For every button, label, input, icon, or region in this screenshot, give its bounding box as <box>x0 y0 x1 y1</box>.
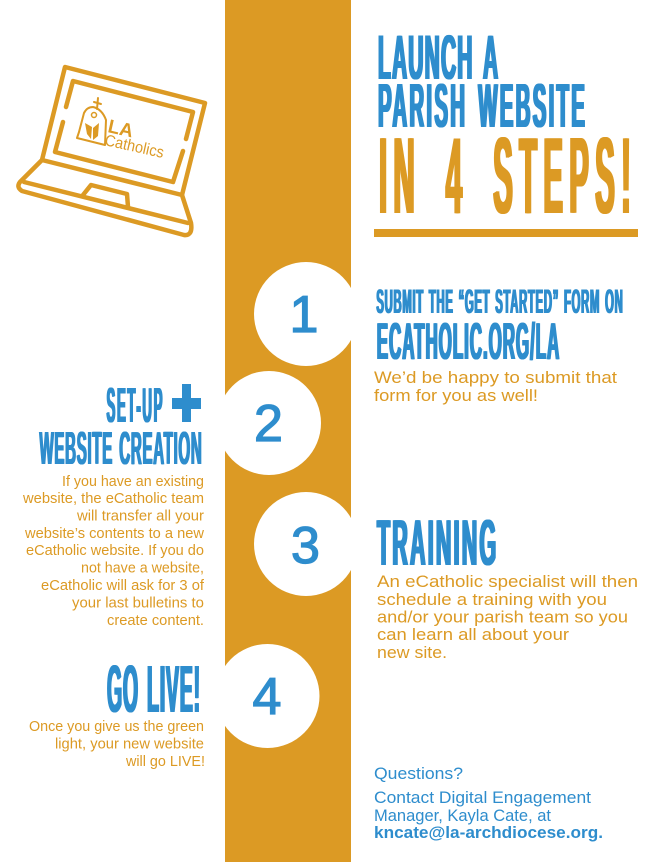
panel: step 3 training <box>377 507 638 662</box>
logo text: LA: LA <box>106 116 135 142</box>
contact text <box>374 789 603 842</box>
step 4 badge: 4 <box>253 668 281 726</box>
contact text: kncate@la-archdiocese.org. <box>374 824 603 842</box>
step 2 body text: create content. <box>107 613 204 629</box>
step 2 body text: website, the eCatholic team <box>22 491 204 507</box>
contact text: Manager, Kayla Cate, at <box>374 807 551 825</box>
step 4 heading: GO LIVE! <box>107 652 200 727</box>
logo text: Catholics: Catholics <box>103 132 165 162</box>
step 2 heading: Website Creation: WEBSITE CREATION <box>39 424 202 475</box>
icon: laptop with LA Catholics logo <box>18 67 205 235</box>
step 2 body text <box>22 474 205 629</box>
step 3 body text: schedule a training with you <box>377 590 607 609</box>
step 2 badge <box>217 371 321 475</box>
step 4 badge <box>216 644 320 748</box>
step 1 url: ECATHOLIC.ORG/LA <box>377 313 559 371</box>
step 2 body text: website’s contents to a new <box>24 526 205 542</box>
panel: step 2 set-up and website creation <box>22 378 205 629</box>
step 1 badge <box>254 262 358 366</box>
panel: questions and contact <box>374 764 603 842</box>
central gold band <box>225 0 351 862</box>
step 3 badge <box>254 492 358 596</box>
title line: Parish Website: PARISH WEBSITE <box>378 71 585 140</box>
step 2 badge: 2 <box>254 395 283 453</box>
step 1 body text: We’d be happy to submit that <box>374 368 617 387</box>
title line: In 4 Steps!: IN 4 STEPS! <box>379 115 631 236</box>
step 3 body text <box>377 572 638 662</box>
step 1 heading line: SUBMIT THE “GET STARTED” FORM ON <box>376 283 623 321</box>
step 3 heading: TRAINING <box>377 507 496 580</box>
step 4 body text: Once you give us the green <box>29 719 204 735</box>
step 3 badge: 3 <box>291 517 320 575</box>
step 3 body text: new site. <box>377 643 447 662</box>
title <box>378 23 631 236</box>
step 2 body text: not have a website, <box>81 560 204 576</box>
step 2 body text: will transfer all your <box>76 508 204 524</box>
step 4 body text: will go LIVE! <box>125 754 205 770</box>
step 2 body text: eCatholic will ask for 3 of <box>41 578 205 594</box>
icon: plus sign <box>172 384 201 422</box>
panel: step 1 submit form <box>374 283 623 405</box>
step 3 body text: and/or your parish team so you <box>377 608 628 626</box>
step 2 body text: your last bulletins to <box>72 596 204 612</box>
panel: step 4 go live <box>29 652 205 770</box>
contact text: Contact Digital Engagement <box>374 789 591 807</box>
title underline <box>374 229 638 237</box>
step 4 body text <box>29 719 205 770</box>
step 2 body text: eCatholic website. If you do <box>26 543 204 559</box>
step 1 body text: form for you as well! <box>374 386 538 405</box>
questions label: Questions? <box>374 764 463 783</box>
step 3 body text: An eCatholic specialist will then <box>377 572 638 591</box>
step 4 body text: light, your new website <box>55 736 204 752</box>
step 2 body text: If you have an existing <box>62 474 204 490</box>
step 1 body text <box>374 368 617 405</box>
step 3 body text: can learn all about your <box>377 625 569 644</box>
step 2 heading: Set-up: SET-UP <box>106 378 162 433</box>
title line: Launch a: LAUNCH A <box>378 23 498 94</box>
step 1 badge: 1 <box>290 286 318 344</box>
